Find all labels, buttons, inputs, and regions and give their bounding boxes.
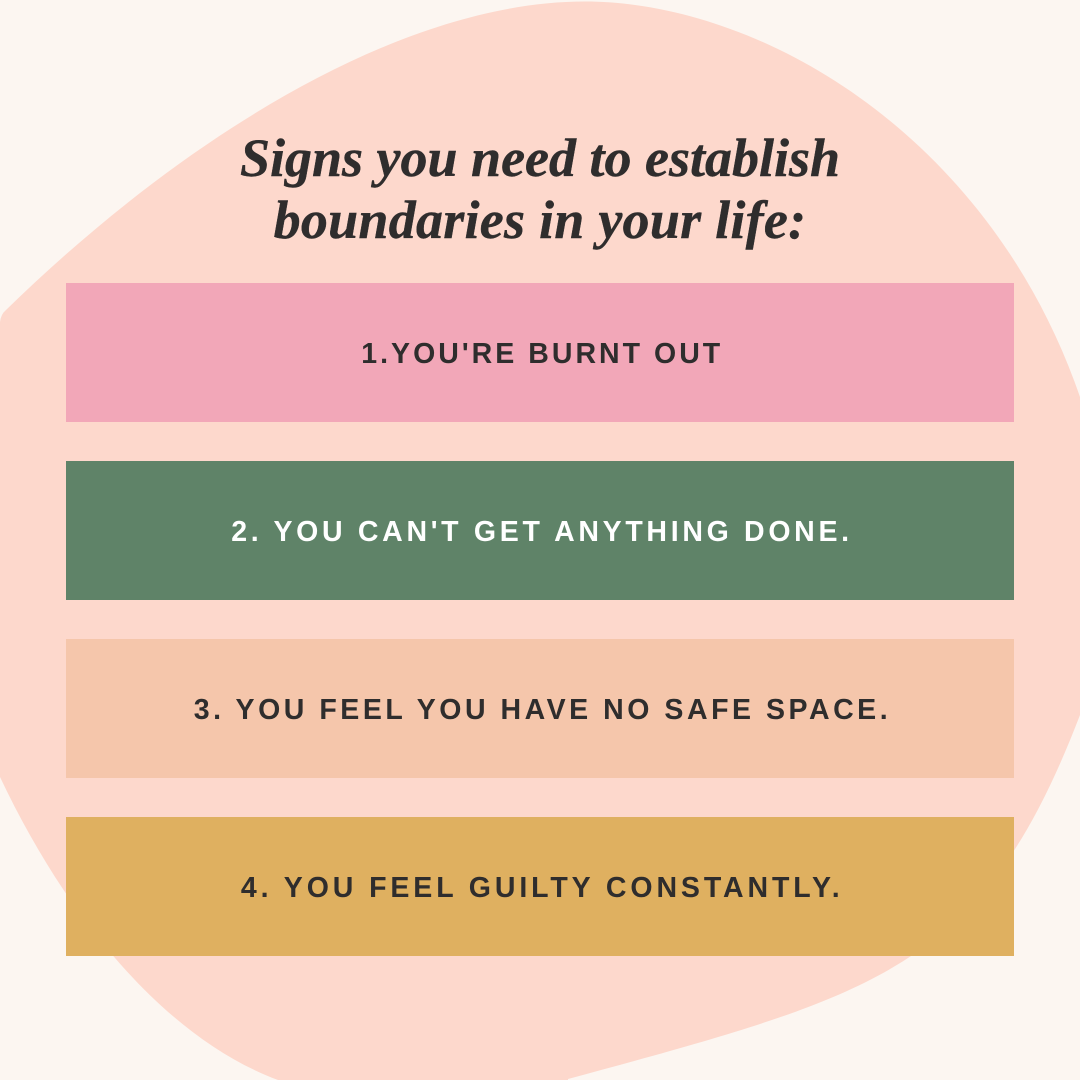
bar 4: guilty constantly: 4. YOU FEEL GUILTY CONSTANTLY. [241,872,844,904]
bar 3: no safe space [66,639,1014,778]
bar 3: no safe space: 3. YOU FEEL YOU HAVE NO SAFE SPACE. [194,694,891,726]
title [240,128,840,250]
bar 4: guilty constantly [66,817,1014,956]
bar 1: burnt out [66,283,1014,422]
title: boundaries in your life: [274,190,806,250]
bar 2: can't get anything done [66,461,1014,600]
title: Signs you need to establish [240,128,840,188]
bar 1: burnt out: 1.YOU'RE BURNT OUT [361,338,723,370]
bar 2: can't get anything done: 2. YOU CAN'T GET ANYTHING DONE. [231,516,853,548]
